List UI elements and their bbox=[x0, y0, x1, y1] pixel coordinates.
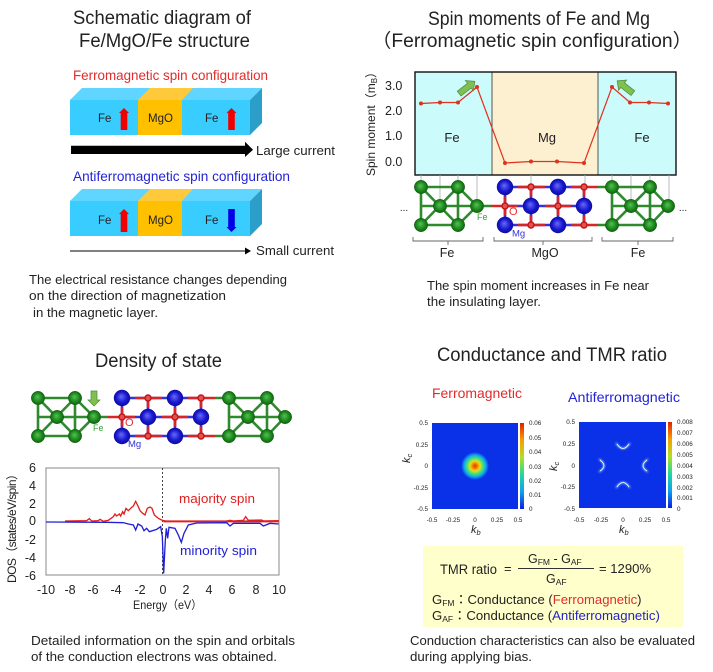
chart: DOS: majority spin bbox=[179, 492, 255, 506]
chart: DOS: -2 bbox=[134, 583, 146, 597]
heatmap: ferromagnetic: 0.02 bbox=[529, 478, 542, 485]
title: schematic diagram: Schematic diagram of bbox=[73, 8, 252, 29]
chart: spin moment line: ） bbox=[364, 66, 378, 78]
title: density of state: Density of state bbox=[95, 351, 222, 372]
chart: DOS: -10 bbox=[37, 583, 55, 597]
callout: TMR ratio formula: G bbox=[546, 572, 556, 586]
title: spin moments bbox=[372, 9, 692, 52]
diagram: lattice with Fe marker: Mg bbox=[128, 439, 141, 450]
chart: DOS: Energy（eV） bbox=[133, 599, 202, 612]
heatmap: antiferromagnetic: k bbox=[619, 524, 624, 536]
heading: ferromagnetic map: Ferromagnetic bbox=[432, 385, 522, 401]
title: spin moments: Spin moments of Fe and Mg bbox=[428, 9, 650, 30]
heatmap: antiferromagnetic: 0.25 bbox=[639, 517, 652, 524]
title: schematic diagram bbox=[73, 8, 252, 52]
heatmap: antiferromagnetic: 0.008 bbox=[677, 419, 693, 426]
heatmap: antiferromagnetic: 0.5 bbox=[662, 517, 671, 524]
heatmap: antiferromagnetic: -0.25 bbox=[594, 517, 609, 524]
callout: TMR ratio formula: - G bbox=[550, 552, 571, 566]
labels: region names: Fe bbox=[440, 246, 454, 260]
chart: DOS: 0 bbox=[29, 514, 36, 528]
guide lines to atoms bbox=[421, 175, 669, 206]
callout: TMR ratio formula: ：Conductance ( bbox=[453, 608, 553, 623]
callout: TMR ratio formula: G bbox=[432, 592, 442, 607]
brackets: Fe MgO Fe bbox=[413, 237, 673, 245]
diagram: lattice with Fe marker: Fe bbox=[93, 423, 104, 433]
text: conductance description: Conduction characteristics can also be evaluated bbox=[410, 634, 695, 648]
heatmap: antiferromagnetic: -0.5 bbox=[564, 506, 575, 513]
block: antiferromagnetic Fe/MgO/Fe stack: MgO bbox=[148, 215, 173, 227]
heatmap: antiferromagnetic: -0.5 bbox=[574, 517, 585, 524]
labels: lattice atoms: O bbox=[509, 206, 518, 218]
arrow: small current bbox=[70, 248, 251, 254]
heatmap: ferromagnetic: 0.03 bbox=[529, 464, 542, 471]
heatmap: antiferromagnetic: 0.003 bbox=[677, 474, 693, 481]
block: ferromagnetic Fe/MgO/Fe stack: Fe bbox=[205, 113, 218, 125]
callout: TMR ratio formula: AF bbox=[571, 557, 582, 567]
chart: DOS: 4 bbox=[29, 479, 36, 493]
callout: TMR ratio formula: Antiferromagnetic) bbox=[552, 608, 660, 623]
callout: TMR ratio formula: = 1290% bbox=[599, 561, 651, 576]
callout: TMR ratio formula: AF bbox=[556, 577, 567, 587]
block: antiferromagnetic Fe/MgO/Fe stack: Fe bbox=[205, 215, 218, 227]
callout: TMR ratio formula bbox=[423, 546, 683, 627]
chart: spin moment line: Mg bbox=[538, 130, 556, 145]
heatmap: antiferromagnetic: 0.005 bbox=[677, 452, 693, 459]
diagram: Fe/MgO/Fe lattice bbox=[414, 179, 675, 233]
heatmap: ferromagnetic: -0.25 bbox=[446, 517, 461, 524]
text: DOS description: of the conduction electrons was obtained. bbox=[31, 650, 277, 664]
chart: spin moment line: 1.0 bbox=[385, 129, 402, 143]
labels: region names: Fe bbox=[631, 246, 645, 260]
text: conductance description bbox=[410, 634, 695, 664]
heatmap: antiferromagnetic: 0.002 bbox=[677, 485, 693, 492]
heatmap: antiferromagnetic: 0 bbox=[621, 517, 625, 524]
heatmap: ferromagnetic: 0.06 bbox=[529, 420, 542, 427]
diagram: lattice with Fe marker: O bbox=[125, 417, 134, 429]
title: spin moments: （Ferromagnetic spin configuration） bbox=[372, 30, 692, 52]
heatmap: ferromagnetic: 0.05 bbox=[529, 435, 542, 442]
heatmap: ferromagnetic: -0.25 bbox=[414, 485, 428, 492]
block: antiferromagnetic Fe/MgO/Fe stack bbox=[70, 189, 262, 236]
chart: DOS: 6 bbox=[229, 583, 236, 597]
text: spin moment description: the insulating layer. bbox=[427, 295, 541, 309]
heatmap: antiferromagnetic: 0.5 bbox=[566, 419, 575, 426]
heatmap: antiferromagnetic: 0.007 bbox=[677, 430, 693, 437]
labels: region names bbox=[440, 246, 645, 260]
arrow: large current bbox=[71, 142, 253, 157]
labels: lattice atoms: Mg bbox=[512, 228, 525, 240]
chart: DOS: 2 bbox=[29, 497, 36, 511]
text: resistance description bbox=[29, 273, 287, 320]
text: resistance description: on the direction of magnetization bbox=[29, 289, 226, 303]
labels: lattice atoms: ... bbox=[400, 203, 408, 214]
callout: TMR ratio formula: FM bbox=[538, 557, 550, 567]
block: ferromagnetic Fe/MgO/Fe stack: Fe bbox=[98, 113, 111, 125]
heatmap: ferromagnetic: 0.5 bbox=[514, 517, 523, 524]
text: resistance description: in the magnetic layer. bbox=[33, 306, 158, 320]
text: DOS description bbox=[31, 634, 295, 664]
heatmap: ferromagnetic: 0.04 bbox=[529, 449, 542, 456]
text: spin moment description: The spin moment increases in Fe near bbox=[427, 279, 649, 293]
heatmap: ferromagnetic: 0 bbox=[424, 463, 428, 470]
heatmap: antiferromagnetic: 0.004 bbox=[677, 463, 693, 470]
callout: TMR ratio formula: ：Conductance ( bbox=[454, 592, 553, 607]
callout: TMR ratio formula: FM bbox=[442, 598, 454, 608]
chart: spin moment line: Fe bbox=[634, 130, 650, 145]
chart: DOS: 8 bbox=[253, 583, 260, 597]
heatmap: ferromagnetic: b bbox=[476, 528, 481, 537]
panel: density of state bbox=[5, 351, 295, 664]
panel: spin moments bbox=[364, 9, 692, 309]
chart: spin moment line: 0.0 bbox=[385, 155, 402, 169]
chart: DOS: 4 bbox=[206, 583, 213, 597]
chart: DOS: 0 bbox=[160, 583, 167, 597]
heatmap: ferromagnetic: k bbox=[401, 458, 413, 463]
heatmap: ferromagnetic: -0.5 bbox=[417, 506, 428, 513]
chart: spin moment line: B bbox=[370, 78, 379, 83]
chart: spin moment line bbox=[364, 66, 676, 176]
chart: DOS: -8 bbox=[64, 583, 76, 597]
diagram: lattice with Fe marker bbox=[31, 390, 292, 450]
chart: DOS: -2 bbox=[25, 533, 36, 547]
chart: DOS: -4 bbox=[25, 551, 36, 565]
heatmap: antiferromagnetic: 0 bbox=[677, 506, 681, 513]
callout: TMR ratio formula: Ferromagnetic) bbox=[553, 592, 642, 607]
chart: DOS: -6 bbox=[25, 569, 36, 583]
heatmap: antiferromagnetic bbox=[548, 419, 693, 537]
heatmap: antiferromagnetic: 0.25 bbox=[563, 441, 575, 448]
heatmap: ferromagnetic: 0.01 bbox=[529, 492, 542, 499]
chart: DOS: DOS（states/eV/spin） bbox=[5, 468, 19, 583]
chart: spin moment line: Spin moment（m bbox=[364, 83, 378, 176]
callout: TMR ratio formula: AF bbox=[442, 614, 453, 624]
chart: DOS: 2 bbox=[183, 583, 190, 597]
callout: TMR ratio formula: G bbox=[432, 608, 442, 623]
heatmap: antiferromagnetic: k bbox=[548, 466, 560, 471]
text: resistance description: The electrical resistance changes depending bbox=[29, 273, 287, 287]
panel: schematic diagram bbox=[29, 8, 335, 320]
callout: TMR ratio formula: TMR ratio bbox=[440, 562, 497, 577]
heatmap: ferromagnetic: -0.5 bbox=[427, 517, 438, 524]
heatmap: ferromagnetic: 0.25 bbox=[491, 517, 504, 524]
chart: spin moment line: 3.0 bbox=[385, 79, 402, 93]
heatmap: antiferromagnetic: 0.006 bbox=[677, 441, 693, 448]
heading: antiferromagnetic configuration: Antiferromagnetic spin configuration bbox=[73, 168, 290, 184]
labels: lattice atoms bbox=[400, 203, 687, 240]
chart: DOS: -4 bbox=[110, 583, 122, 597]
chart: spin moment line: 2.0 bbox=[385, 104, 402, 118]
labels: lattice atoms: Fe bbox=[477, 212, 488, 222]
heatmap: antiferromagnetic: 0.001 bbox=[677, 495, 693, 502]
block: ferromagnetic Fe/MgO/Fe stack: MgO bbox=[148, 113, 173, 125]
title: conductance and TMR ratio: Conductance and TMR ratio bbox=[437, 345, 667, 366]
chart: DOS bbox=[5, 461, 286, 612]
title: schematic diagram: Fe/MgO/Fe structure bbox=[79, 31, 250, 52]
heatmap: ferromagnetic: 0.25 bbox=[416, 442, 428, 449]
heatmap: antiferromagnetic: c bbox=[552, 462, 561, 466]
callout: TMR ratio formula: G bbox=[528, 552, 538, 566]
heading: ferromagnetic configuration: Ferromagnetic spin configuration bbox=[73, 67, 268, 83]
text: spin moment description bbox=[427, 279, 649, 309]
text: DOS description: Detailed information on the spin and orbitals bbox=[31, 634, 295, 648]
heatmap: antiferromagnetic: b bbox=[624, 528, 629, 537]
block: antiferromagnetic Fe/MgO/Fe stack: Fe bbox=[98, 215, 111, 227]
heatmap: ferromagnetic: c bbox=[405, 454, 414, 458]
callout: TMR ratio formula: = bbox=[504, 561, 512, 576]
heatmap: ferromagnetic: k bbox=[471, 524, 476, 536]
label: large current: Large current bbox=[256, 143, 335, 158]
heatmap: ferromagnetic: 0.5 bbox=[419, 420, 428, 427]
chart: spin moment line: Fe bbox=[444, 130, 460, 145]
block: ferromagnetic Fe/MgO/Fe stack bbox=[70, 88, 262, 135]
panel: conductance and TMR ratio bbox=[401, 345, 695, 664]
chart: DOS: -6 bbox=[87, 583, 99, 597]
heatmap: ferromagnetic bbox=[401, 420, 542, 537]
text: conductance description: during applying bias. bbox=[410, 650, 532, 664]
label: small current: Small current bbox=[256, 243, 334, 258]
heatmap: ferromagnetic: 0 bbox=[529, 506, 533, 513]
chart: DOS: minority spin bbox=[180, 544, 257, 558]
heatmap: ferromagnetic: 0 bbox=[473, 517, 477, 524]
heatmap: antiferromagnetic: -0.25 bbox=[561, 484, 575, 491]
heatmap: antiferromagnetic: 0 bbox=[571, 463, 575, 470]
chart: DOS: 6 bbox=[29, 461, 36, 475]
heading: antiferromagnetic map: Antiferromagnetic bbox=[568, 389, 680, 405]
labels: lattice atoms: ... bbox=[679, 203, 687, 214]
chart: DOS: 10 bbox=[272, 583, 286, 597]
labels: region names: MgO bbox=[531, 246, 559, 260]
